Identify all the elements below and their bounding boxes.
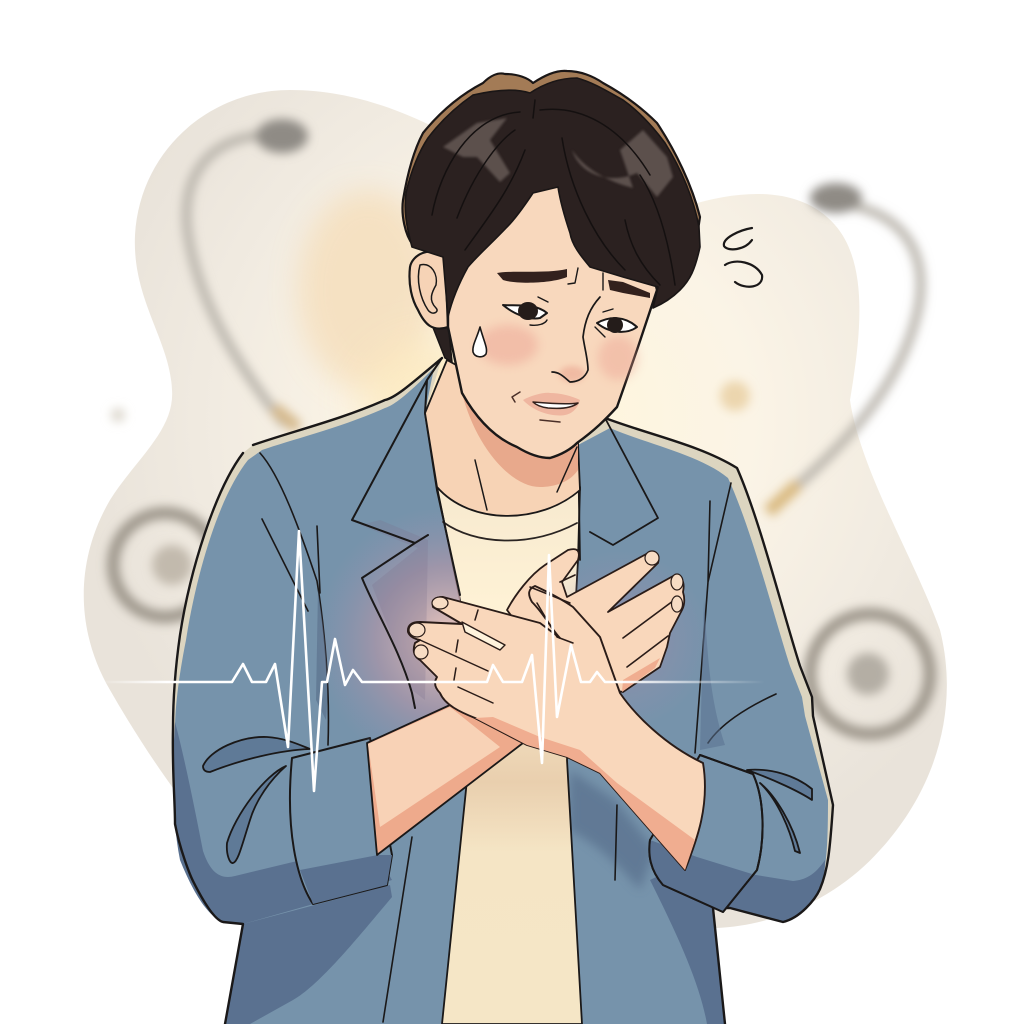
eyes (503, 305, 547, 318)
hand reaching to upper right (507, 549, 684, 692)
face (448, 170, 657, 458)
nose tip (559, 366, 585, 382)
ECG line (100, 531, 765, 791)
lapels (352, 358, 658, 708)
background blob (84, 90, 947, 928)
figure (173, 71, 833, 1024)
mouth (523, 393, 580, 415)
shirt (437, 487, 582, 1024)
hair highlights (443, 118, 510, 182)
cuffs (290, 738, 763, 912)
sleeve folds (203, 737, 812, 863)
hair strands (432, 100, 675, 285)
stress swirl (724, 228, 762, 287)
hair brown rim (402, 71, 700, 250)
jacket seams (260, 453, 776, 1022)
eyebrows (497, 269, 567, 283)
left forearm (367, 705, 523, 855)
hair dark (405, 78, 700, 317)
sweat drop (473, 327, 487, 357)
jacket outline (173, 358, 833, 1024)
chest glow (300, 510, 710, 770)
jacket (173, 358, 833, 1024)
nose (552, 297, 600, 382)
hand reaching to upper left (408, 586, 705, 870)
neck hair (432, 322, 452, 362)
blurred stethoscope left (111, 119, 308, 617)
head and hair (402, 71, 700, 458)
jacket shadows (173, 722, 392, 924)
cheek blush (478, 325, 538, 365)
neck (425, 360, 580, 516)
ear (409, 252, 448, 329)
blurred stethoscope right (720, 183, 930, 734)
